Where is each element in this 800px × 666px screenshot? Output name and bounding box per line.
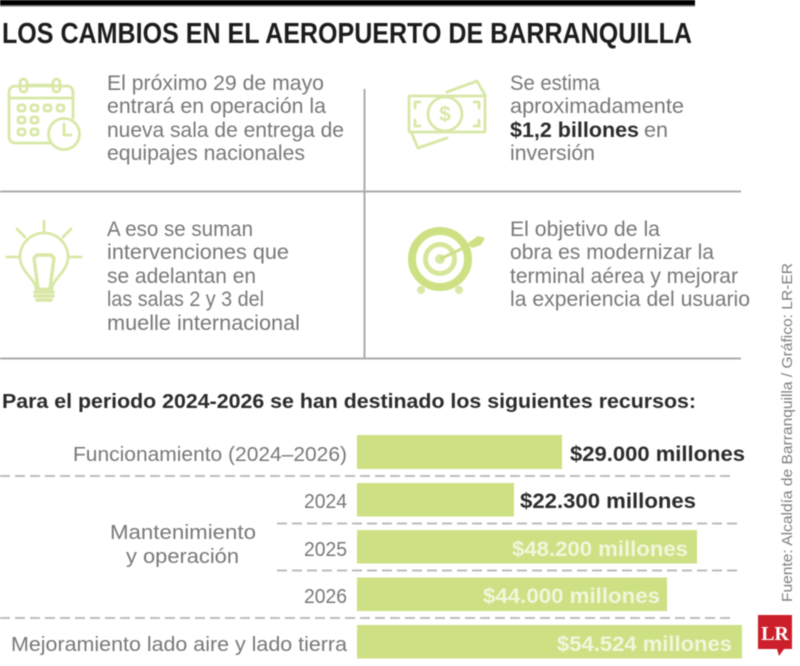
bar chart: resources (0, 435, 745, 658)
text block: investment: en (644, 119, 668, 142)
text block: international pier works (107, 218, 300, 335)
bar: Funcionamiento (73, 435, 745, 469)
label: Mantenimiento y operación: Mantenimiento (110, 521, 256, 544)
icon: banknotes (409, 81, 485, 148)
text block: investment (510, 72, 684, 165)
icon: banknotes: $ (439, 103, 451, 126)
heading: resources: Para el periodo 2024-2026 se han destinado los siguientes recursos: (2, 391, 696, 413)
text block: investment: inversión (510, 142, 595, 165)
text block: investment: $1,2 billones (510, 119, 639, 142)
panel: international pier works (7, 218, 300, 335)
text block: new baggage hall: equipajes nacionales (107, 142, 305, 165)
text block: objective: terminal aérea y mejorar (510, 265, 738, 288)
text block: objective (510, 218, 750, 311)
text block: international pier works: A eso se suman (107, 218, 253, 241)
text block: objective: la experiencia del usuario (510, 288, 750, 311)
bar: 2025: $48.200 millones (512, 538, 688, 561)
bar: 2024 (304, 483, 696, 516)
bar: 2025: 2025 (304, 538, 347, 561)
label: Mantenimiento y operación (110, 521, 256, 568)
text block: investment: Se estima (510, 72, 600, 95)
logo: LR: LR (761, 623, 789, 645)
bar: Funcionamiento: $29.000 millones (570, 443, 745, 466)
text block: objective: El objetivo de la (510, 218, 660, 241)
bar: 2025 (304, 530, 697, 564)
text block: international pier works: muelle internacional (107, 312, 300, 335)
text block: international pier works: intervenciones que (107, 241, 289, 264)
bar: 2026: 2026 (304, 585, 347, 608)
icon: target with dart (412, 231, 485, 294)
panel: investment (409, 72, 684, 165)
bar: Funcionamiento: Funcionamiento (2024–2026) (73, 443, 347, 466)
bar: 2024: 2024 (304, 490, 347, 513)
bar: Mejoramiento: $54.524 millones (557, 633, 732, 656)
text block: new baggage hall: El próximo 29 de mayo (107, 72, 324, 95)
logo: LR (758, 615, 792, 656)
panel: objective (412, 218, 750, 311)
panel: new baggage hall (9, 72, 344, 165)
bar: Mejoramiento (11, 625, 742, 658)
text block: investment: aproximadamente (510, 95, 684, 118)
icon: calendar with clock (9, 79, 80, 150)
text block: objective: obra es modernizar la (510, 241, 714, 264)
text block: new baggage hall: nueva sala de entrega de (107, 119, 344, 142)
bar: Mejoramiento: Mejoramiento lado aire y lado tierra (11, 633, 348, 656)
text block: international pier works: las salas 2 y 3 del (107, 288, 264, 311)
source credit: Fuente: Alcaldía de Barranquilla / Gráfico: LR-ER (779, 263, 796, 602)
bar: 2026: $44.000 millones (483, 585, 660, 608)
text block: new baggage hall (107, 72, 344, 165)
title: LOS CAMBIOS EN EL AEROPUERTO DE BARRANQUILLA (2, 18, 692, 50)
label: Mantenimiento y operación: y operación (126, 545, 239, 568)
text block: international pier works: se adelantan en (107, 265, 256, 288)
bar: 2026 (304, 578, 667, 611)
bar: 2024: $22.300 millones (520, 490, 696, 513)
text block: new baggage hall: entrará en operación la (107, 95, 326, 118)
icon: light bulb (7, 221, 81, 300)
